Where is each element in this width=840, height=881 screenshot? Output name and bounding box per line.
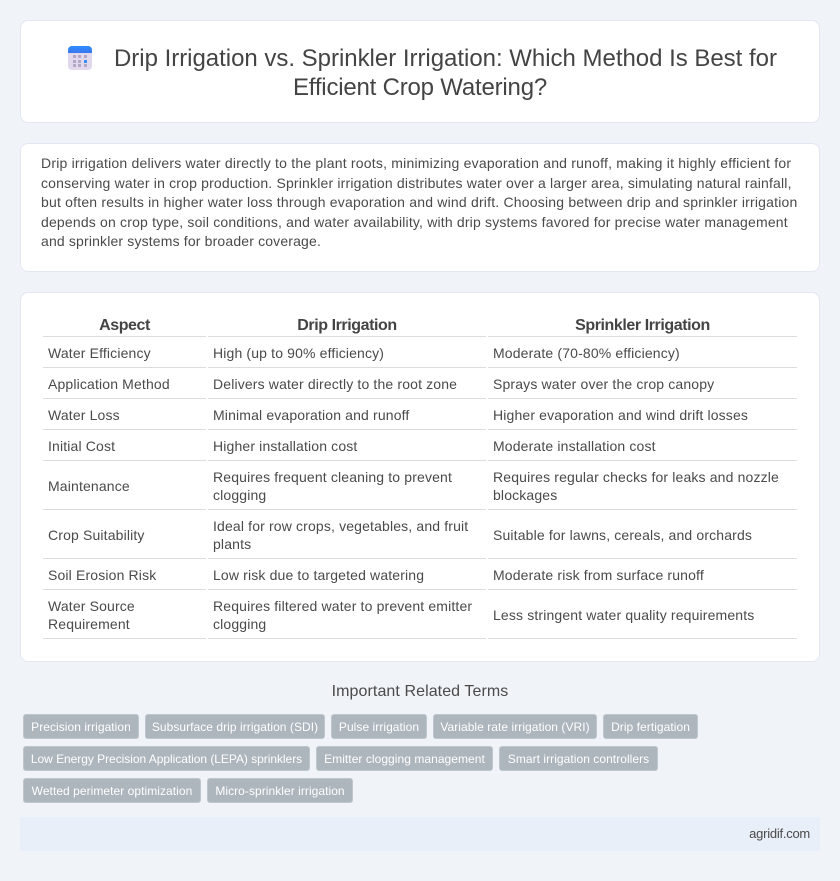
row: maintenance: Requires frequent cleaning to prevent [213, 469, 452, 485]
tag [316, 746, 493, 771]
row: water source requirement: Water Source [48, 598, 135, 614]
tag: Precision irrigation [31, 720, 131, 734]
title: Drip Irrigation vs. Sprinkler Irrigation: Which Method Is Best for [114, 45, 777, 72]
tag [331, 714, 427, 739]
row: water source requirement: clogging [213, 616, 266, 632]
tag: Low Energy Precision Application (LEPA) sprinklers [31, 752, 302, 766]
title [114, 45, 777, 101]
row: water efficiency: Moderate (70-80% efficiency) [493, 345, 680, 361]
row: crop suitability: Crop Suitability [48, 527, 145, 543]
table header [99, 317, 710, 334]
row: soil erosion risk: Low risk due to targeted watering [213, 567, 424, 583]
intro text [41, 155, 798, 249]
row: water loss: Water Loss [48, 407, 120, 423]
row: application method: Delivers water directly to the root zone [213, 376, 457, 392]
footer bar [20, 817, 820, 851]
tag [23, 714, 139, 739]
row: water loss: Higher evaporation and wind drift losses [493, 407, 748, 423]
tag [23, 778, 201, 803]
table header: Aspect [99, 317, 150, 334]
row: water source requirement: Less stringent water quality requirements [493, 607, 754, 623]
row: water loss: Minimal evaporation and runoff [213, 407, 409, 423]
tag: Variable rate irrigation (VRI) [440, 720, 590, 734]
row: soil erosion risk [48, 567, 704, 583]
footer text: agridif.com [749, 826, 810, 841]
row: maintenance: clogging [213, 487, 266, 503]
row: maintenance: Requires regular checks for leaks and nozzle [493, 469, 779, 485]
row: application method [48, 376, 714, 392]
tag: Pulse irrigation [339, 720, 419, 734]
tag: Emitter clogging management [324, 752, 485, 766]
intro text: Drip irrigation delivers water directly to the plant roots, minimizing evaporation and runoff, making it highly efficient for [41, 155, 791, 171]
row: initial cost [48, 438, 656, 454]
comparison table [43, 317, 797, 639]
heading: important related terms: Important Related Terms [332, 683, 508, 700]
panel: related term tags [23, 714, 698, 803]
row: crop suitability: Suitable for lawns, cereals, and orchards [493, 527, 752, 543]
table header: Drip Irrigation [297, 317, 397, 334]
title: Efficient Crop Watering? [293, 74, 547, 101]
row: water source requirement: Requires filtered water to prevent emitter [213, 598, 472, 614]
row: initial cost: Initial Cost [48, 438, 115, 454]
row: soil erosion risk: Moderate risk from surface runoff [493, 567, 704, 583]
tag: Drip fertigation [611, 720, 690, 734]
row: crop suitability [48, 518, 752, 552]
tag [433, 714, 597, 739]
tag [603, 714, 698, 739]
intro text: depends on crop type, soil conditions, and water availability, with drip systems favored for precise water management [41, 214, 788, 230]
row: maintenance: Maintenance [48, 478, 130, 494]
row: water efficiency [48, 345, 680, 361]
row: water loss [48, 407, 748, 423]
row: crop suitability: Ideal for row crops, vegetables, and fruit [213, 518, 468, 534]
intro text: and sprinkler systems for broader coverage. [41, 233, 321, 249]
row: water efficiency: Water Efficiency [48, 345, 151, 361]
row: water efficiency: High (up to 90% efficiency) [213, 345, 384, 361]
row: water source requirement: Requirement [48, 616, 130, 632]
tag: Smart irrigation controllers [508, 752, 649, 766]
intro text: but often results in higher water loss through evaporation and wind drift. Choosing between drip and sprinkler irrigation [41, 194, 798, 210]
row: application method: Sprays water over the crop canopy [493, 376, 714, 392]
tag: Wetted perimeter optimization [32, 784, 192, 798]
table header: Sprinkler Irrigation [575, 317, 710, 334]
panel: title card [20, 20, 820, 123]
icon: calendar [68, 46, 92, 70]
row: water source requirement [48, 598, 754, 632]
row: soil erosion risk: Soil Erosion Risk [48, 567, 156, 583]
tag [207, 778, 353, 803]
intro text: conserving water in crop production. Sprinkler irrigation distributes water over a larger area, simulating natural rainfall, [41, 174, 792, 190]
row: maintenance [48, 469, 779, 503]
tag [23, 746, 310, 771]
row: initial cost: Higher installation cost [213, 438, 357, 454]
panel: introduction [20, 143, 820, 272]
tag [145, 714, 325, 739]
tag: Micro-sprinkler irrigation [215, 784, 345, 798]
row: initial cost: Moderate installation cost [493, 438, 656, 454]
row: application method: Application Method [48, 376, 170, 392]
row: crop suitability: plants [213, 536, 251, 552]
panel: comparison table [20, 292, 820, 662]
tag [499, 746, 658, 771]
row: maintenance: blockages [493, 487, 557, 503]
tag: Subsurface drip irrigation (SDI) [152, 720, 318, 734]
